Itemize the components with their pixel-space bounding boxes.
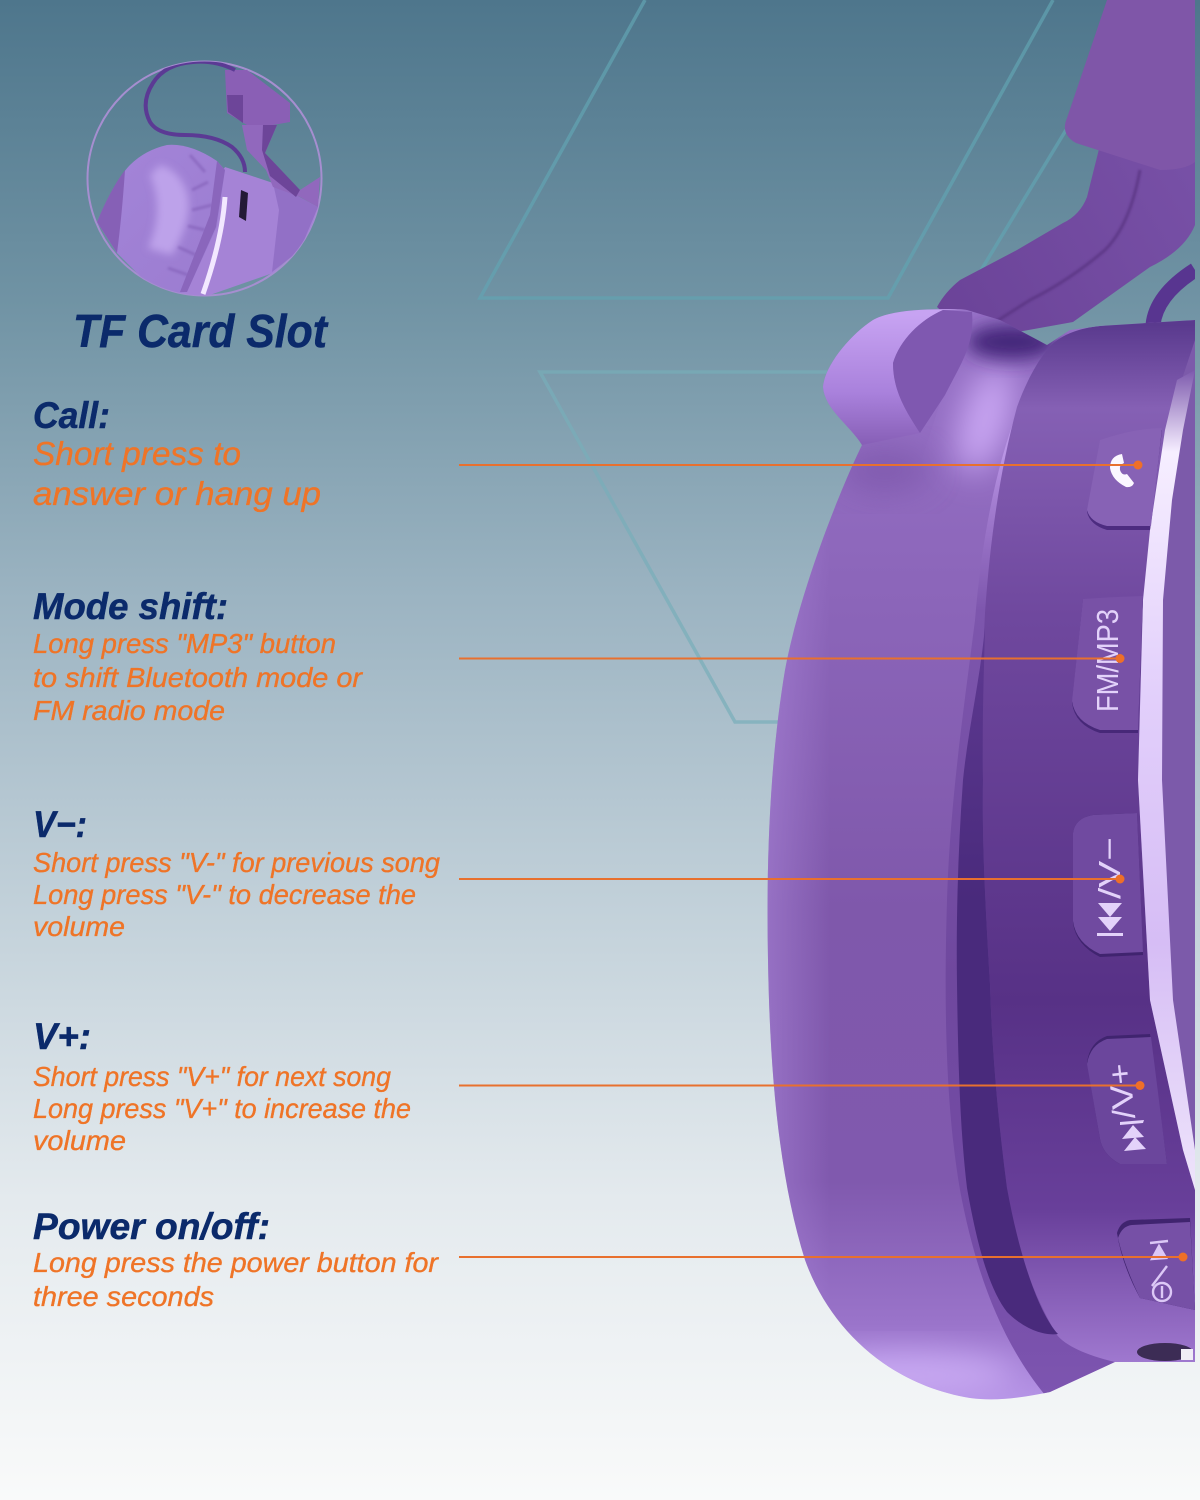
metallic ring xyxy=(1138,370,1195,1190)
button: FM/MP3: FM/MP3 xyxy=(1090,609,1125,712)
button: V-: /V− xyxy=(1092,837,1127,899)
icon: inset ear cup xyxy=(180,167,318,296)
callout: call: Short press to xyxy=(33,435,241,472)
callout: volume down: volume xyxy=(33,911,125,942)
icon: inset cable xyxy=(146,62,245,172)
button: FM/MP3 xyxy=(1072,596,1143,733)
button: V- xyxy=(1073,813,1143,957)
callout: mode shift: FM radio mode xyxy=(33,695,225,726)
callout: volume down: Short press "V-" for previous song xyxy=(33,847,440,878)
fabric inner xyxy=(1143,340,1195,1149)
shadow under yoke xyxy=(966,324,1058,360)
leader line: volume down xyxy=(459,874,1124,884)
icon: yoke crease xyxy=(998,170,1142,320)
icon: inset arm xyxy=(242,125,320,207)
button: V+ xyxy=(1087,1034,1167,1164)
callout: volume down: Long press "V-" to decrease the xyxy=(33,879,416,910)
callout: power: Power on/off: xyxy=(33,1206,270,1247)
leader line: power xyxy=(459,1252,1188,1262)
callout: power xyxy=(33,1206,440,1312)
shadow under bump xyxy=(846,446,922,492)
inset: TF card slot photo xyxy=(88,62,322,296)
button: call xyxy=(1087,428,1162,530)
heading: TF Card Slot: TF Card Slot xyxy=(73,305,329,357)
callout: volume up xyxy=(33,1016,411,1156)
callout: mode shift: Long press "MP3" button xyxy=(33,628,336,659)
leader line: call xyxy=(459,460,1142,470)
callout: call xyxy=(33,395,321,512)
callout: volume up: Long press "V+" to increase the xyxy=(33,1093,411,1124)
callout: call: Call: xyxy=(33,395,110,436)
icon: cable xyxy=(1153,270,1195,325)
icon: yoke arm xyxy=(937,145,1195,340)
icon: TF card slot xyxy=(239,190,248,221)
icon: headband xyxy=(1065,0,1195,170)
button: V+: /V+ xyxy=(1101,1062,1142,1121)
icon: inset metallic ring xyxy=(203,197,225,294)
groove xyxy=(957,627,1058,1334)
decorative geometric outlines xyxy=(480,0,1066,722)
callout: power: three seconds xyxy=(33,1281,214,1312)
callout: mode shift: to shift Bluetooth mode or xyxy=(33,662,364,693)
leader line: mode shift xyxy=(459,654,1124,663)
leader line: volume up xyxy=(459,1081,1144,1090)
icon: next track xyxy=(1120,1120,1146,1151)
callout: volume up: volume xyxy=(33,1125,126,1156)
callout: call: answer or hang up xyxy=(33,475,321,512)
callout: mode shift xyxy=(33,586,364,726)
icon: phone xyxy=(1110,454,1134,487)
icon: inset ear pad xyxy=(97,145,225,296)
callout: volume up: V+: xyxy=(33,1016,91,1057)
icon: inset hinge xyxy=(225,70,290,125)
button: power xyxy=(1117,1218,1195,1310)
icon: ear cushion xyxy=(760,300,1200,1410)
callout: volume down xyxy=(33,804,440,942)
callout: volume up: Short press "V+" for next song xyxy=(33,1061,391,1092)
icon: cushion bump xyxy=(823,309,967,445)
callout: power: Long press the power button for xyxy=(33,1247,440,1278)
ear cup housing xyxy=(982,320,1195,1362)
icon: bottom hinge xyxy=(1137,1343,1193,1361)
headphone illustration xyxy=(760,0,1200,1410)
icon: play pause and power symbols xyxy=(1150,1241,1171,1301)
icon: previous track xyxy=(1097,903,1123,936)
ear cup outer band xyxy=(946,426,1114,1394)
callout: volume down: V−: xyxy=(33,804,87,845)
callout: mode shift: Mode shift: xyxy=(33,586,228,627)
